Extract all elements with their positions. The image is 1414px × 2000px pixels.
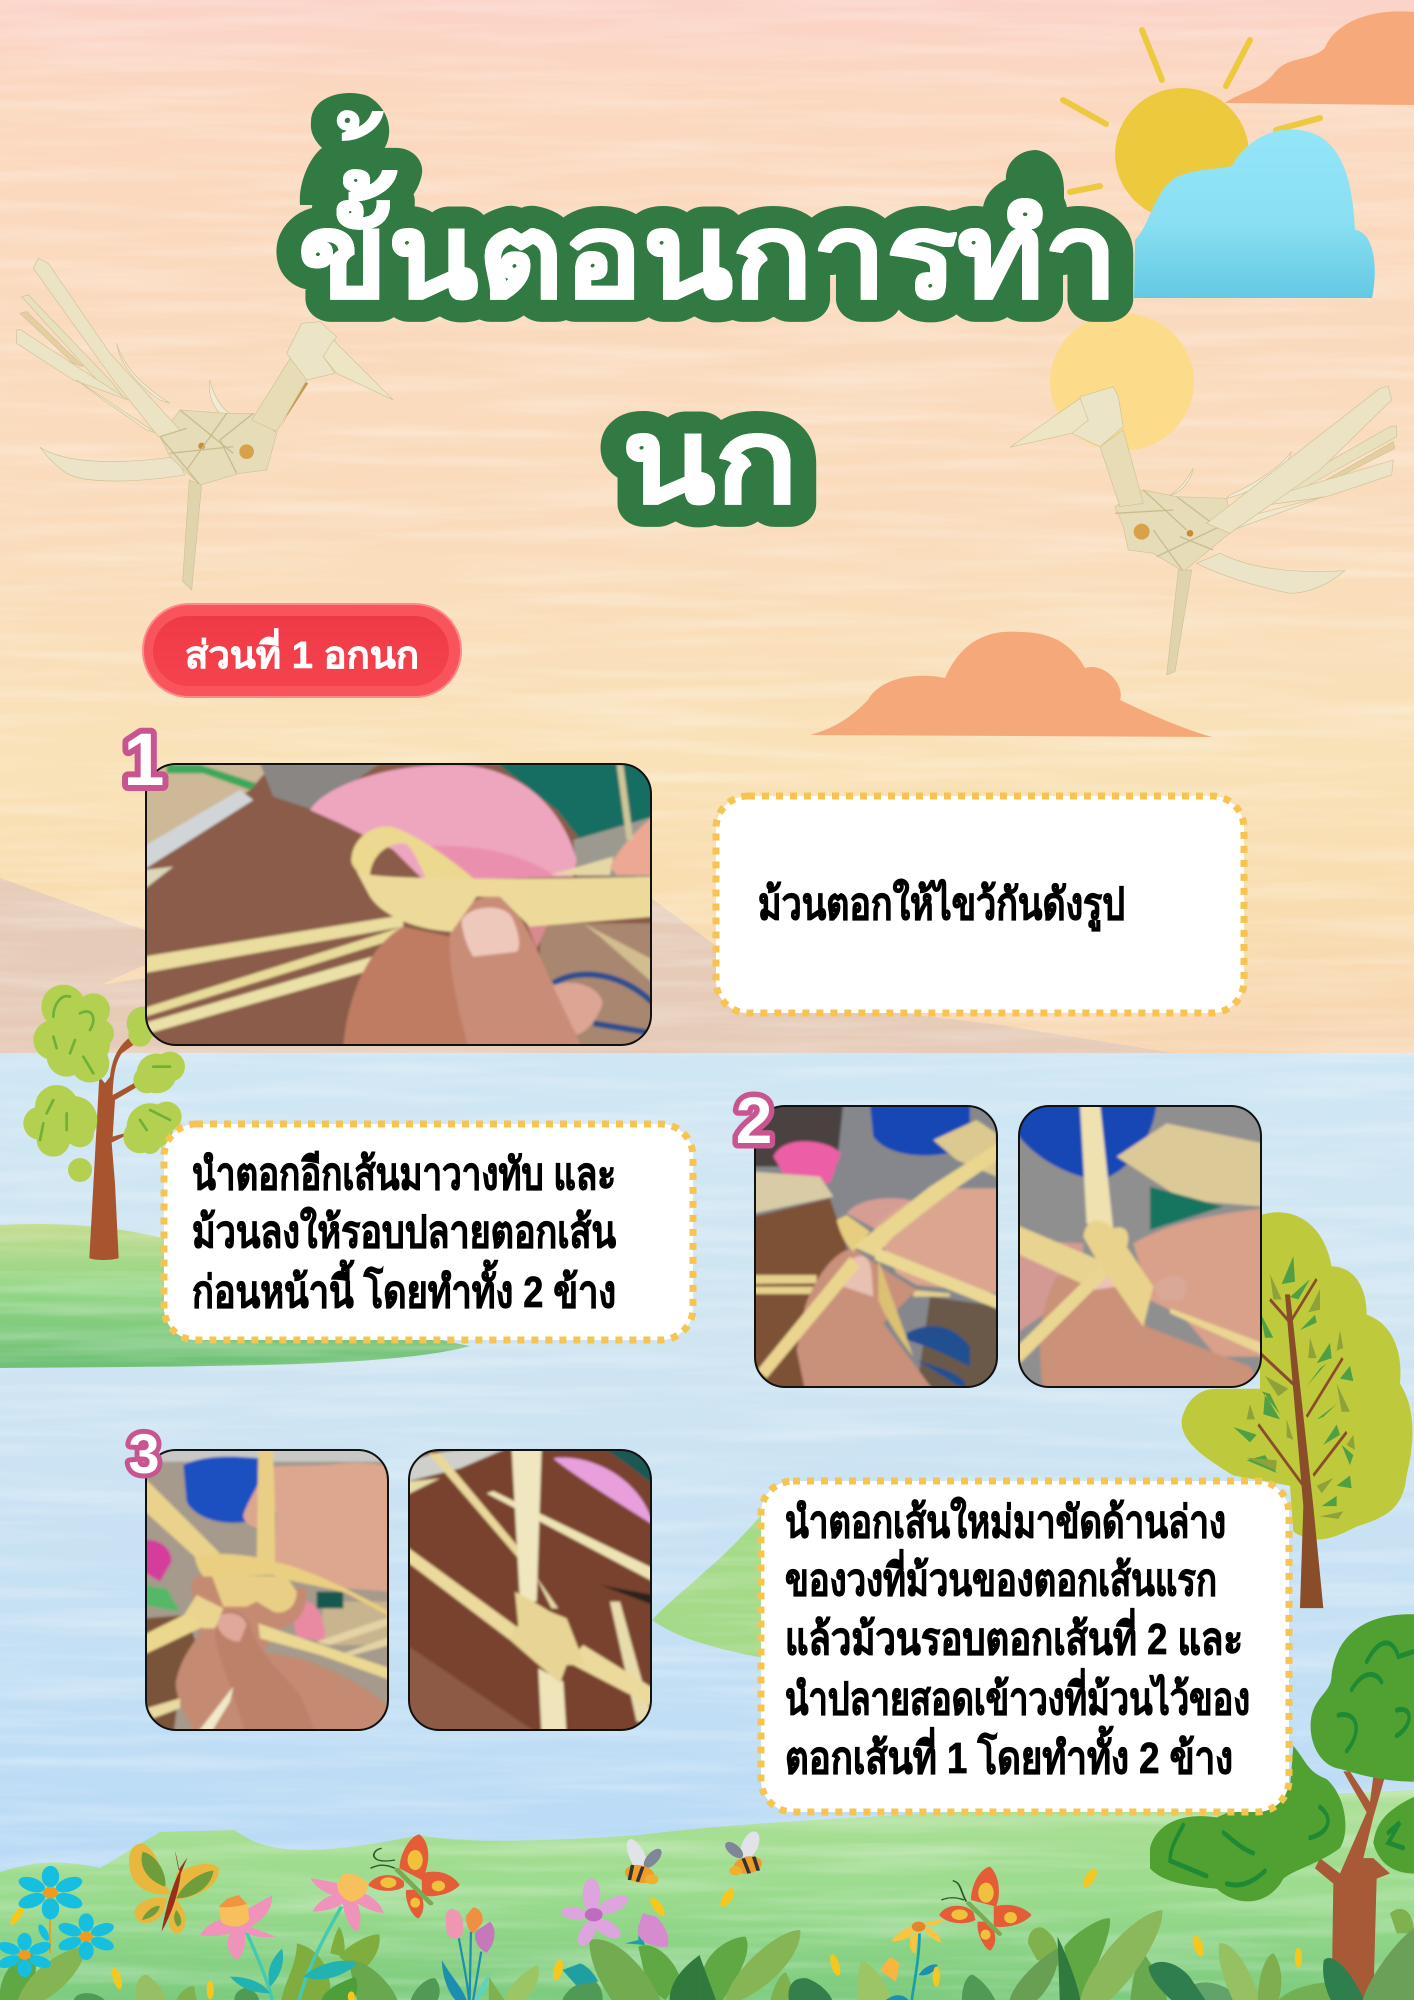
butterfly orange left bbox=[368, 1834, 460, 1918]
yellow flower and teal stem bbox=[880, 1918, 944, 2000]
woven bird left bbox=[17, 258, 393, 590]
bee two bbox=[722, 1830, 766, 1877]
text box step 3 bbox=[761, 1481, 1289, 1812]
flower: lilac bbox=[560, 1878, 668, 1948]
butterfly yellow green bbox=[129, 1843, 219, 1934]
section button: ส่วนที่ 1 อกนก bbox=[185, 628, 419, 677]
bottom foliage left half bbox=[0, 1927, 700, 2000]
section button bbox=[143, 604, 461, 697]
background: meadow ground bbox=[0, 1790, 1414, 2000]
tulips bbox=[446, 1907, 494, 1953]
sun with rays bbox=[1063, 30, 1320, 220]
text box step 2: ม้วนลงให้รอบปลายตอกเส้น bbox=[192, 1206, 616, 1257]
orange cloud lower bbox=[810, 632, 1212, 737]
text box step 3: นำปลายสอดเข้าวงที่ม้วนไว้ของ bbox=[785, 1668, 1250, 1724]
title mark outline bbox=[300, 93, 1064, 215]
number badge 2: 2 bbox=[736, 1083, 772, 1157]
title raised tone mark: ้ bbox=[337, 110, 385, 263]
photo step 1 bbox=[143, 763, 653, 1050]
text box step 1 bbox=[716, 796, 1244, 1013]
butterfly orange right bbox=[939, 1867, 1032, 1951]
background: distant hills bbox=[0, 878, 1230, 1062]
background: right green hill bbox=[652, 1510, 775, 1660]
title bbox=[298, 93, 1118, 528]
text box step 2 bbox=[164, 1124, 693, 1340]
pale yellow sun bbox=[1050, 313, 1194, 451]
text box step 3: นำตอกเส้นใหม่มาขัดด้านล่าง bbox=[785, 1496, 1226, 1547]
text box step 1: ม้วนตอกให้ไขว้กันดังรูป bbox=[758, 878, 1125, 931]
woven bird right bbox=[1010, 386, 1397, 675]
background: blue water sky bbox=[0, 1053, 1414, 2000]
left tree bbox=[23, 985, 185, 1260]
flowers: blue bbox=[0, 1866, 117, 1977]
flower: pink left bbox=[200, 1895, 276, 1960]
photo step 3 left bbox=[143, 1448, 390, 1735]
text box step 3: แล้วม้วนรอบตอกเส้นที่ 2 และ bbox=[785, 1608, 1243, 1664]
bottom foliage right half bbox=[700, 1909, 1414, 2000]
title line 1: ขั้นตอนการทำ bbox=[298, 170, 1118, 323]
blue cloud bbox=[1134, 129, 1375, 298]
photo step 3 right bbox=[407, 1448, 653, 1735]
number badge 1: 1 bbox=[123, 718, 165, 801]
yellow grass buds left bbox=[8, 1896, 668, 2000]
dark green tree right bbox=[1150, 1614, 1414, 2000]
photo step 2 left bbox=[753, 1103, 1000, 1390]
yellow grass buds right bbox=[718, 1867, 1302, 1987]
background: peach textured sky bbox=[0, 0, 1414, 1056]
text box step 3: ของวงที่ม้วนของตอกเส้นแรก bbox=[785, 1549, 1217, 1605]
teal plant stems and leaves bbox=[230, 1907, 645, 2000]
text box step 3: ตอกเส้นที่ 1 โดยทำทั้ง 2 ข้าง bbox=[785, 1725, 1233, 1783]
title line 2: นก bbox=[622, 396, 798, 528]
background: left green hill bbox=[0, 1224, 470, 1368]
bee one bbox=[621, 1837, 665, 1886]
lime tree right bbox=[1182, 1212, 1412, 1608]
text box step 2: นำตอกอีกเส้นมาวางทับ และ bbox=[192, 1150, 616, 1199]
flower: pink upper bbox=[310, 1873, 384, 1932]
text box step 2: ก่อนหน้านี้ โดยทำทั้ง 2 ข้าง bbox=[192, 1259, 616, 1317]
photo step 2 right bbox=[1017, 1103, 1263, 1390]
number badge 3: 3 bbox=[128, 1422, 160, 1485]
orange cloud top right bbox=[1225, 11, 1414, 105]
